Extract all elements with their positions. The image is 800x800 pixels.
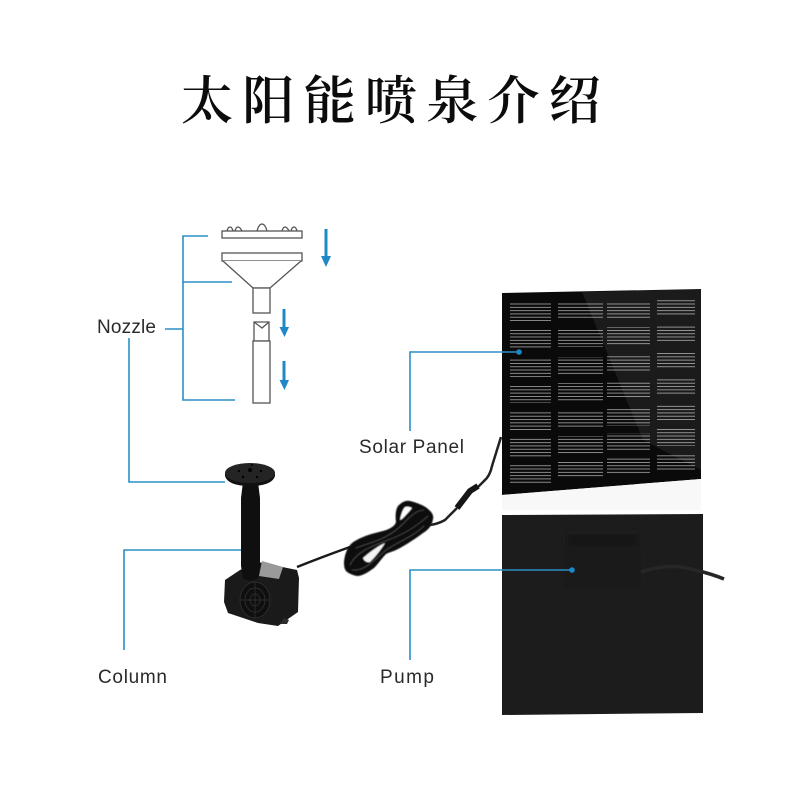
title: 太阳能喷泉介绍 [181, 59, 610, 134]
label: Nozzle: Nozzle [97, 317, 156, 338]
back cable [641, 566, 724, 579]
panel reflection below [502, 479, 701, 510]
nozzle funnel [222, 253, 302, 313]
nozzle stem [253, 322, 270, 403]
arrow 1 [321, 229, 331, 267]
arrow 3 [280, 361, 289, 390]
solar panel [502, 289, 701, 510]
fan grille [240, 582, 270, 618]
connector cable [430, 437, 501, 525]
box shadow [568, 530, 637, 548]
column tube [241, 482, 260, 580]
junction box [564, 547, 641, 589]
pump and fountain product [224, 437, 501, 626]
pump label [259, 561, 283, 579]
pump body [224, 562, 299, 626]
glass sheen [582, 289, 701, 470]
label: Solar Panel: Solar Panel [359, 437, 464, 458]
nozzle top plate [222, 224, 302, 238]
cable connector [457, 486, 478, 508]
label: Column: Column [98, 667, 167, 688]
fountain head [225, 463, 275, 486]
pump leader [410, 567, 575, 660]
label: Pump: Pump [380, 667, 434, 688]
nozzle leader line [129, 338, 225, 482]
panel glass [502, 289, 701, 495]
panel back with pump box [502, 514, 724, 715]
solar cells [510, 299, 695, 483]
column leader line [124, 550, 241, 650]
pump foot [280, 618, 289, 624]
nozzle exploded diagram [222, 224, 331, 403]
cable coil [344, 501, 433, 576]
nozzle bracket lines [165, 236, 235, 400]
back plate [502, 514, 703, 715]
pump cable [297, 547, 350, 567]
arrow 2 [280, 309, 289, 337]
solar panel leader [410, 349, 522, 431]
